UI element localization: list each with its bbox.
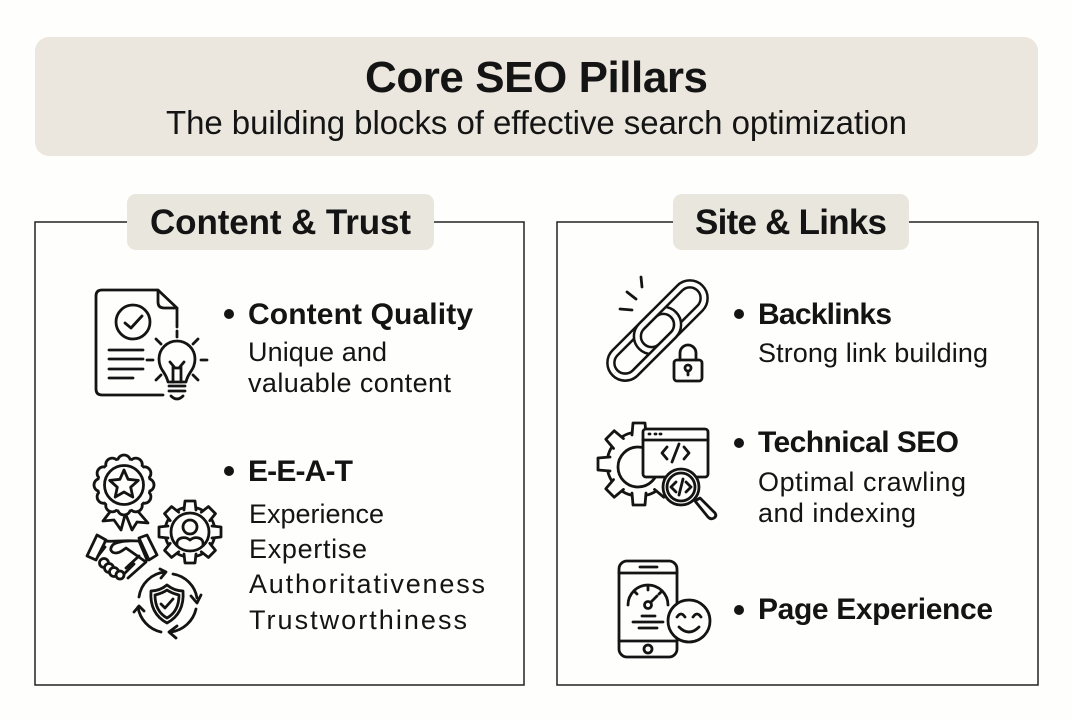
item: Page Experience: Page Experience — [758, 593, 993, 626]
panel: Content & Trust — [35, 194, 524, 685]
item: Technical SEO: Optimal crawling — [758, 467, 966, 497]
icon: award, handshake, gear and shield — [87, 455, 221, 638]
icon: handshake — [87, 535, 157, 579]
icon: gear with person — [159, 501, 221, 563]
icon: chain link with padlock — [605, 277, 710, 383]
item: E-E-A-T: Expertise — [249, 534, 367, 564]
panel heading: Content & Trust — [127, 194, 434, 250]
icon: document with check and light bulb — [96, 290, 207, 399]
item: Content Quality — [224, 298, 473, 398]
icon: award rosette — [94, 455, 154, 530]
item: E-E-A-T — [224, 455, 485, 635]
item: Backlinks: Backlinks — [758, 298, 892, 331]
panel heading: Site & Links — [673, 194, 909, 250]
panel: Site & Links — [557, 194, 1038, 685]
item: Technical SEO — [734, 426, 966, 528]
subtitle: The building blocks of effective search optimization — [166, 104, 907, 141]
panel heading: Site & Links: Site & Links — [695, 203, 887, 242]
header banner — [35, 37, 1038, 156]
item: E-E-A-T: Trustworthiness — [249, 605, 467, 635]
item: Backlinks: Strong link building — [758, 338, 988, 368]
item: Technical SEO: Technical SEO — [758, 426, 959, 459]
item: Technical SEO: and indexing — [758, 498, 916, 528]
icon: shield with rotating arrows — [134, 569, 201, 638]
item: E-E-A-T: E-E-A-T — [248, 455, 353, 488]
panel heading: Content & Trust: Content & Trust — [150, 203, 411, 242]
item: E-E-A-T: Experience — [249, 499, 384, 529]
item: Content Quality: valuable content — [248, 368, 451, 398]
icon: phone with speed gauge and smiley — [619, 561, 710, 657]
item: E-E-A-T: Authoritativeness — [249, 569, 485, 599]
icon: gear, code window and magnifier — [598, 423, 716, 519]
title: Core SEO Pillars — [365, 53, 708, 102]
item: Content Quality: Content Quality — [248, 298, 473, 331]
item: Content Quality: Unique and — [248, 337, 387, 367]
item: Backlinks — [734, 298, 988, 368]
